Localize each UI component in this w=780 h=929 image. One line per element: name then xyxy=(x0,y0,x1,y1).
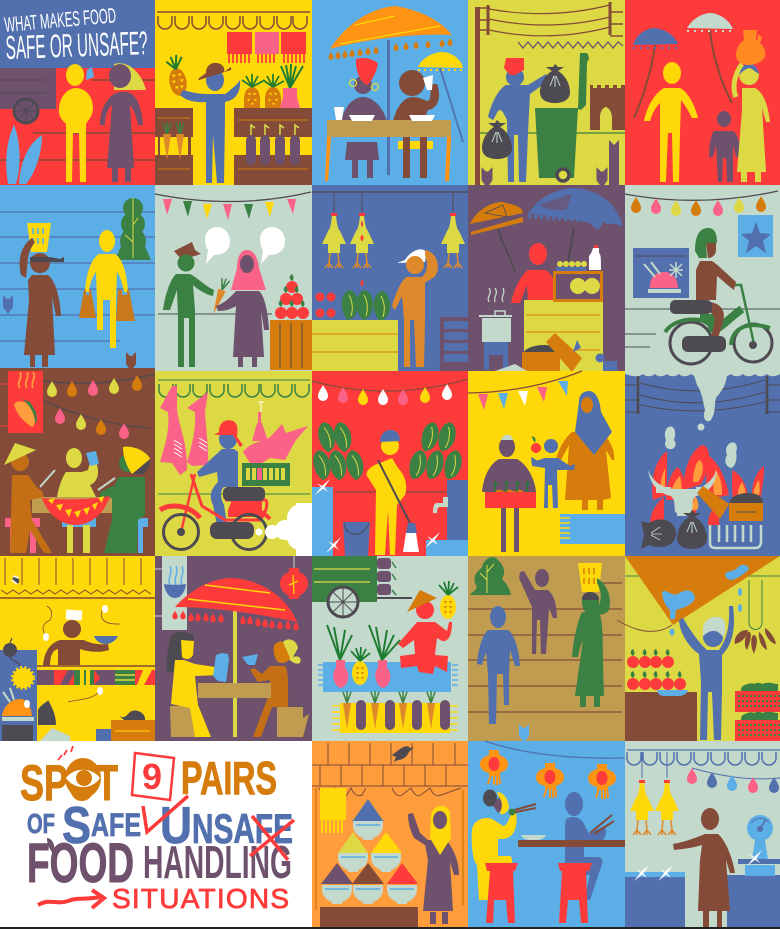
heading: spot 9 pairs xyxy=(20,746,277,811)
icon: bucket xyxy=(343,522,370,556)
stall xyxy=(524,300,603,371)
figure: yellow man xyxy=(644,62,698,182)
icon: broken orange umbrella xyxy=(470,202,523,272)
figure: adult from behind xyxy=(477,606,520,724)
yellow carpet xyxy=(332,703,458,733)
umbrella pole xyxy=(233,610,237,737)
panel: woman with basket xyxy=(0,185,155,371)
icon: hat top xyxy=(582,592,599,600)
icon: red umbrella xyxy=(172,578,299,630)
panel: family under umbrellas xyxy=(625,0,780,185)
icon: red cross xyxy=(250,816,294,860)
infographic: SAFE OR UNSAFE? xyxy=(5,24,148,66)
figure: middle diner xyxy=(57,448,98,553)
figure: vendor xyxy=(673,808,735,927)
table with bowl and cup xyxy=(325,107,451,181)
panel: motorbike delivering frozen chicken xyxy=(625,185,780,371)
sign: taco xyxy=(0,371,43,433)
bunting flags xyxy=(478,381,568,410)
figure: woman with jar xyxy=(734,63,770,182)
figure: sweeping person xyxy=(367,430,406,555)
panel: man and woman buying vegetable xyxy=(155,185,312,371)
panel: open burning waste xyxy=(625,371,780,556)
number box xyxy=(132,753,174,800)
stools xyxy=(5,518,148,553)
scooter seat and engine xyxy=(177,487,265,539)
icon: garbage bags xyxy=(641,510,707,549)
icon: leafy greens left xyxy=(311,421,366,481)
icon: sun xyxy=(13,668,33,688)
icon: paper cup xyxy=(423,75,433,90)
icon: chest xyxy=(697,486,763,521)
heading: spot 9 pairs: SPOT xyxy=(20,755,118,811)
heading: of safe unsafe: AFE xyxy=(91,807,141,843)
sparkles xyxy=(634,850,762,881)
clean counters xyxy=(625,872,780,927)
heading: of safe unsafe: NSAFE xyxy=(192,805,293,852)
icon: umbrellas xyxy=(633,13,733,118)
figure: red vendor xyxy=(511,243,572,303)
rubbish boxes xyxy=(495,333,617,372)
figure: man with raised arms xyxy=(679,606,734,740)
icon: check mark xyxy=(143,796,188,832)
icon: tree xyxy=(470,557,511,595)
icon: round bomb-like pest xyxy=(3,638,20,666)
icon: conical hat xyxy=(407,590,437,612)
icon: cutlery xyxy=(40,470,115,490)
heading: of safe unsafe xyxy=(27,797,293,855)
stools and legs xyxy=(345,137,433,178)
heading: of safe unsafe: S xyxy=(62,797,91,855)
figure: right diner xyxy=(100,454,145,553)
stall shelves left and right xyxy=(155,108,312,185)
stall base xyxy=(320,907,418,927)
blue cabinet xyxy=(0,650,37,741)
blue cloth xyxy=(318,662,458,692)
icon: ribs xyxy=(710,525,761,548)
panel: three people eating at table xyxy=(0,371,155,556)
icon: chef hat xyxy=(66,609,82,621)
icon: hanging chickens xyxy=(630,780,679,835)
band of pattern xyxy=(37,670,155,685)
icon: stall pineapples xyxy=(242,74,284,108)
icon: hanging chickens xyxy=(322,213,465,268)
icon: chopsticks and ball xyxy=(508,804,536,816)
icon: plate xyxy=(94,636,118,644)
icon: hanging chillies xyxy=(735,580,776,654)
icon: orange umbrella xyxy=(328,6,452,60)
figure: woman with chopsticks xyxy=(472,790,517,900)
sign: hot soup xyxy=(155,556,187,630)
icon: trash bags xyxy=(482,64,570,159)
icon: leafy greens right xyxy=(406,420,465,482)
icon: speech bubbles xyxy=(205,227,285,264)
icon: bottle xyxy=(213,653,229,682)
icon: green cart xyxy=(312,556,412,617)
string of bulbs xyxy=(631,196,766,216)
icon: cats and column xyxy=(482,140,619,188)
figure: man with white cap xyxy=(392,249,438,367)
sign: frozen chicken xyxy=(633,248,689,298)
figure: man with bag xyxy=(488,68,548,182)
hanging cloths xyxy=(227,32,306,63)
icon: pink vase with greens xyxy=(280,64,303,108)
heading: of safe unsafe: U xyxy=(160,797,192,855)
figure: woman in pink scarf xyxy=(216,250,269,367)
figure: seated seller xyxy=(398,601,452,674)
icon: small yellow umbrella xyxy=(418,52,463,142)
strings of lights xyxy=(43,374,155,439)
bunting flags xyxy=(163,199,296,220)
icon: vases with greens xyxy=(327,625,400,688)
icon: carrots and aubergines xyxy=(343,691,450,730)
figure: woman carrying basket xyxy=(20,238,64,367)
icon: hat xyxy=(198,63,231,80)
utility post and wires xyxy=(475,2,623,185)
icon: pineapple held xyxy=(439,581,458,619)
heading: situations: SITUATIONS xyxy=(112,883,289,914)
icon: smog scallops and cloud xyxy=(625,371,780,468)
bottom edge xyxy=(0,927,780,929)
icon: red arrow xyxy=(38,890,104,908)
icon: yellow basket xyxy=(27,223,51,252)
figure: man with paper xyxy=(393,70,439,121)
counter xyxy=(312,320,398,371)
string of bulbs xyxy=(687,768,780,793)
figure: man with shopping bags xyxy=(85,230,128,348)
figure: man with chopsticks xyxy=(565,792,606,900)
icon: apple xyxy=(531,436,541,453)
icon: aubergines xyxy=(246,125,300,165)
icon: blue cloth xyxy=(560,514,625,544)
icon: broken blue umbrella xyxy=(528,188,622,262)
icon: plant xyxy=(6,125,42,184)
figure: yellow man xyxy=(59,64,93,182)
icon: tomato pile xyxy=(275,274,309,319)
sign: star xyxy=(738,215,773,257)
panel: what makes food safe or unsafe xyxy=(0,0,155,185)
icon: green moped frame and wheels xyxy=(665,285,772,364)
panel: couple eating under umbrella xyxy=(312,0,468,185)
table xyxy=(32,497,123,513)
icon: tray of vegetables xyxy=(485,482,536,508)
sparkles xyxy=(315,479,440,553)
panel: clean market with children xyxy=(468,556,625,743)
icon: cup xyxy=(86,451,99,466)
figure: woman in yellow scarf xyxy=(408,806,459,924)
icon: orange jar xyxy=(736,30,765,65)
icon: flames xyxy=(650,445,764,525)
panel: dripping tarp over fruit stall xyxy=(617,556,780,741)
curtain xyxy=(0,558,155,666)
heading: food handling xyxy=(27,831,292,894)
scallops xyxy=(627,752,776,765)
figure: child xyxy=(709,111,741,182)
icon: yellow hat xyxy=(123,447,150,474)
figure: chef xyxy=(43,620,109,666)
icon: red helmet xyxy=(214,420,243,447)
icon: spice bowls pyramid xyxy=(321,799,418,904)
figure: child xyxy=(531,439,575,508)
icon: pineapple on cloth xyxy=(351,647,370,685)
figure: rider xyxy=(695,228,736,345)
icon: conical hat xyxy=(4,443,36,465)
icon: yellow basket xyxy=(578,563,602,592)
icon: lantern xyxy=(280,556,308,599)
stools xyxy=(170,706,309,737)
icon: carrots xyxy=(163,122,184,160)
icon: red cap xyxy=(504,58,524,75)
blood drops xyxy=(360,221,364,286)
panel: spices in bowls xyxy=(312,741,468,927)
crate xyxy=(111,720,155,741)
figure: woman with turban xyxy=(341,58,387,121)
wires xyxy=(625,376,780,414)
icon: broom xyxy=(378,460,419,552)
icon: scale xyxy=(738,815,780,876)
icon: eye xyxy=(58,746,101,798)
panel: family with fruit xyxy=(468,371,625,556)
figure: man with hat xyxy=(180,69,240,183)
crate xyxy=(242,463,290,486)
icon: rat xyxy=(116,710,145,720)
icon: green bin xyxy=(535,53,589,181)
heading: food handling: FOOD xyxy=(27,831,134,894)
stall xyxy=(625,692,697,741)
icon: hanging cloth xyxy=(320,788,346,833)
figure: man eating xyxy=(250,639,301,737)
figure: woman with scarf xyxy=(86,63,146,182)
icon: exhaust smoke xyxy=(256,503,316,556)
icon: seat and engine xyxy=(670,300,757,352)
icon: pineapple held xyxy=(165,54,189,97)
icon: scooter xyxy=(160,474,270,550)
panel: waste in a bin xyxy=(468,0,625,188)
red tablecloth xyxy=(42,496,110,525)
icon: steaming pot xyxy=(479,288,512,370)
icon: crate with lemons xyxy=(553,271,603,302)
heading: of safe unsafe: OF xyxy=(27,808,55,839)
icon: bird xyxy=(392,746,414,762)
figure: woman in blue scarf xyxy=(555,391,614,510)
icon: arch xyxy=(590,85,625,130)
icon: crate xyxy=(440,317,468,371)
title: what makes food safe or unsafe xyxy=(3,4,148,66)
icon: pig carcasses xyxy=(160,386,308,475)
icon: tap xyxy=(433,497,448,513)
bricks xyxy=(312,743,468,796)
string of bulbs xyxy=(318,384,452,405)
counter with bowl xyxy=(518,835,625,847)
icon: tomatoes xyxy=(627,649,686,690)
panel: chef with flies and rats xyxy=(0,556,155,741)
figure: left diner with conical hat xyxy=(10,453,52,553)
heading: food handling: HANDLING xyxy=(143,836,292,888)
panel: couple at dining counter xyxy=(468,741,625,927)
clean counters xyxy=(312,480,468,556)
figure: man in green with hat xyxy=(163,242,214,367)
icon: crate xyxy=(270,320,312,370)
number box: 9 xyxy=(142,756,162,797)
icon: water on tarp xyxy=(662,565,749,710)
panel: chickens and vegetables on clean counter xyxy=(312,185,468,371)
figure: woman in green xyxy=(572,578,610,707)
icon: cup xyxy=(242,654,258,665)
icon: cats xyxy=(3,295,136,371)
icon: red crates xyxy=(735,683,780,741)
icon: cow skull xyxy=(648,470,717,516)
icon: lanterns xyxy=(480,750,616,799)
table xyxy=(198,683,271,698)
panel: clean poultry stall xyxy=(625,741,780,927)
figure: man with tray xyxy=(482,435,536,552)
panel: seller with vegetables on carpet xyxy=(312,556,468,741)
panel: title block xyxy=(0,741,312,927)
panel: broken umbrellas and messy stall xyxy=(468,185,625,372)
icon: cart xyxy=(0,68,56,123)
panel: person sweeping clean stall xyxy=(311,371,468,556)
icon: shopping bags xyxy=(79,290,135,321)
eggs and bottle xyxy=(556,245,601,271)
panel: scooter with raw meat xyxy=(155,371,316,556)
icon: cat xyxy=(519,724,529,743)
icon: roast chicken xyxy=(2,688,34,741)
icon: mask and hair xyxy=(703,617,726,637)
icon: blue dish xyxy=(657,690,688,696)
icon: tree xyxy=(115,198,151,260)
icon: small tomatoes xyxy=(316,292,336,318)
icon: carrot xyxy=(209,277,230,316)
figure: rider xyxy=(197,429,238,530)
icon: flies xyxy=(11,575,120,702)
icon: rubbish bag and paper xyxy=(38,700,112,741)
figure: child with raised arm xyxy=(519,569,557,654)
heading: spot 9 pairs: PAIRS xyxy=(181,752,277,804)
figure: woman eating xyxy=(167,632,222,737)
icon: chopsticks xyxy=(590,815,614,834)
icon: red stools xyxy=(485,863,592,923)
icon: orange tarp xyxy=(625,556,780,625)
panel: couple under red umbrella xyxy=(155,556,312,741)
icon: leafy greens xyxy=(342,290,390,321)
panel: fruit and vegetable stall xyxy=(155,0,312,185)
